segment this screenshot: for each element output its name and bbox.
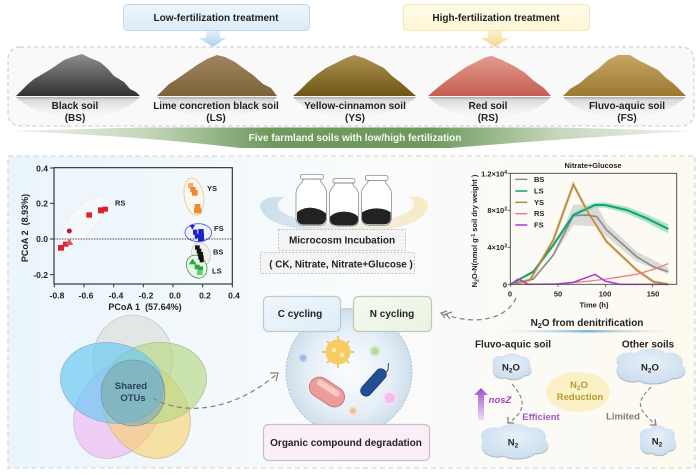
cluster labels: YS bbox=[207, 184, 217, 193]
soil: fluvo-aquic soil bbox=[563, 55, 686, 124]
box: treatments: ( CK, Nitrate, Nitrate+Glucose ) bbox=[269, 260, 413, 270]
chart: PCoA scatter bbox=[20, 164, 240, 312]
soil: lime concretion black soil bbox=[153, 55, 279, 124]
N2O reduction ellipse: N bbox=[570, 380, 577, 391]
heading: fluvo-aquic soil: Fluvo-aquic soil bbox=[475, 340, 551, 350]
y tick labels bbox=[33, 164, 48, 280]
x tick labels bbox=[50, 290, 240, 300]
arrow: nosZ increase bbox=[474, 388, 488, 420]
legend labels: FS bbox=[534, 220, 544, 230]
heading: other soils: Other soils bbox=[622, 340, 675, 350]
cluster labels: FS bbox=[214, 224, 224, 233]
cloud: N2 fluvo-aquic: N bbox=[508, 438, 515, 448]
soil: red soil: Red soil bbox=[469, 101, 508, 112]
chart y ticks bbox=[481, 170, 507, 290]
label: nosZ: nosZ bbox=[489, 395, 513, 406]
soil: black soil: Black soil bbox=[52, 101, 99, 112]
soil: yellow-cinnamon soil: (YS) bbox=[345, 113, 365, 124]
low-fertilization label box bbox=[124, 4, 310, 30]
soil: yellow-cinnamon soil bbox=[293, 55, 416, 124]
y tick labels: -0.2 bbox=[33, 270, 48, 280]
box: organic compound degradation bbox=[264, 424, 430, 460]
cloud: N2O fluvo-aquic: N bbox=[502, 362, 509, 374]
cluster labels: RS bbox=[115, 198, 125, 208]
soil: red soil bbox=[428, 56, 551, 124]
N2O reduction ellipse: O bbox=[581, 380, 588, 391]
chart y ticks: 1.2×10 bbox=[481, 170, 504, 178]
x axis title: PCoA 1 (57.64%) bbox=[108, 302, 182, 312]
y tick labels: 0.4 bbox=[36, 164, 48, 174]
chart x ticks bbox=[508, 290, 659, 298]
cluster labels: LS bbox=[212, 266, 222, 276]
arrow: shared OTUs to microbes bbox=[153, 373, 278, 408]
banner: five farmland soils: Five farmland soils with low/high fertilization bbox=[249, 133, 461, 144]
box: N cycling: N cycling bbox=[370, 309, 414, 320]
y tick labels: 0.2 bbox=[36, 198, 48, 208]
arrow: limited reduction bbox=[640, 387, 656, 425]
chart y title: N bbox=[470, 282, 479, 287]
N2O reduction ellipse: Reduction bbox=[557, 392, 603, 403]
cloud: N2O other soils bbox=[617, 349, 685, 385]
jar right bbox=[361, 176, 391, 225]
N2O reduction ellipse bbox=[546, 372, 610, 412]
chart y ticks: 4×10 bbox=[487, 243, 504, 252]
venn center label bbox=[115, 381, 147, 404]
soil: lime concretion black soil: (LS) bbox=[206, 113, 226, 124]
label: efficient: Efficient bbox=[522, 412, 561, 423]
x tick labels: -0.8 bbox=[50, 290, 65, 300]
cloud: N2 fluvo-aquic bbox=[481, 424, 549, 460]
chart x ticks: 100 bbox=[599, 290, 611, 298]
cloud: N2O fluvo-aquic bbox=[493, 353, 532, 380]
microbe: small blue cell bbox=[299, 354, 307, 362]
panel: lower analysis section bbox=[8, 156, 695, 468]
box: microcosm incubation: Microcosm Incubation bbox=[289, 236, 395, 246]
section title: O from denitrification bbox=[542, 318, 643, 329]
x tick labels: -0.2 bbox=[139, 290, 154, 300]
label: limited: Limited bbox=[606, 412, 640, 422]
venn center label: OTUs bbox=[120, 393, 146, 404]
chart y title: O-N(nmol g bbox=[470, 238, 479, 279]
cloud: N2O other soils: 2 bbox=[648, 368, 652, 374]
box: N cycling bbox=[354, 296, 432, 332]
chart title: Nitrate+Glucose bbox=[565, 161, 621, 170]
top section: soil treatments bbox=[8, 4, 694, 148]
cloud: N2 fluvo-aquic: 2 bbox=[515, 442, 519, 450]
crescent backdrop bbox=[260, 197, 428, 232]
chart y title: soil dry weight ) bbox=[470, 174, 479, 234]
box: treatments bbox=[260, 252, 414, 274]
chart y ticks: 4 bbox=[504, 170, 507, 176]
chart x title: Time (h) bbox=[579, 300, 609, 310]
cloud: N2O other soils: N bbox=[641, 362, 648, 374]
cloud: N2 other soils: N bbox=[652, 436, 659, 448]
legend labels bbox=[534, 175, 544, 230]
box: C cycling bbox=[264, 296, 340, 332]
microbe: small green cell bbox=[370, 346, 380, 356]
denitrification section bbox=[474, 318, 685, 460]
high-fertilization label box bbox=[404, 4, 590, 30]
venn diagram: shared OTUs bbox=[53, 315, 214, 475]
low-fertilization label box: Low-fertilization treatment bbox=[153, 13, 279, 24]
chart y title: 2 bbox=[474, 279, 480, 282]
line chart: N2O over time bbox=[470, 161, 677, 310]
chart x ticks: 0 bbox=[508, 290, 512, 298]
chart x ticks: 150 bbox=[647, 290, 659, 298]
legend line samples bbox=[515, 179, 527, 225]
microbial cell bbox=[286, 308, 412, 435]
x tick labels: 0.0 bbox=[169, 290, 181, 300]
panel: five farmland soils bbox=[8, 47, 694, 126]
cloud: N2O fluvo-aquic: 2 bbox=[509, 368, 513, 374]
chart y ticks: 3 bbox=[504, 206, 507, 212]
legend labels: BS bbox=[534, 175, 544, 184]
section title: 2 bbox=[538, 323, 542, 330]
microbe: blue bacillus bbox=[358, 363, 389, 398]
soil: lime concretion black soil: Lime concretion black soil bbox=[153, 101, 279, 112]
soil: black soil bbox=[16, 54, 140, 124]
cloud: N2O fluvo-aquic: O bbox=[513, 362, 520, 374]
y axis title: PCoA 2 (8.93%) bbox=[20, 194, 30, 262]
legend labels: RS bbox=[534, 209, 544, 218]
cluster labels bbox=[115, 184, 224, 276]
microbe: yellow coccus bbox=[322, 336, 354, 368]
x tick labels: -0.4 bbox=[109, 290, 124, 300]
box: microcosm incubation bbox=[278, 230, 406, 250]
x tick labels: -0.6 bbox=[79, 290, 94, 300]
cluster labels: BS bbox=[213, 248, 223, 256]
soil: yellow-cinnamon soil: Yellow-cinnamon soil bbox=[304, 101, 406, 112]
jar middle bbox=[329, 179, 359, 226]
chart y ticks: 8×10 bbox=[487, 206, 504, 215]
legend labels: LS bbox=[534, 186, 544, 196]
title rule bbox=[498, 330, 678, 332]
N2O reduction ellipse: 2 bbox=[577, 385, 581, 392]
incubation jars bbox=[260, 174, 428, 232]
chart y ticks: 3 bbox=[504, 244, 507, 250]
venn center label: Shared bbox=[115, 381, 147, 392]
chart y title: -1 bbox=[471, 234, 477, 238]
arrow: chart to N cycling bbox=[441, 298, 516, 320]
soil: fluvo-aquic soil: (FS) bbox=[617, 113, 637, 124]
microbe: pink cell bbox=[384, 392, 396, 404]
x tick labels: 0.2 bbox=[199, 290, 211, 300]
arrow: low-fertilization down bbox=[199, 31, 226, 47]
curves and axes bbox=[508, 173, 677, 287]
box: C cycling: C cycling bbox=[278, 309, 322, 320]
plot markers and hulls bbox=[50, 168, 232, 287]
cloud: N2 other soils: 2 bbox=[659, 442, 663, 448]
x tick labels: 0.4 bbox=[228, 290, 240, 300]
arrow: high-fertilization down bbox=[481, 31, 509, 47]
soil: fluvo-aquic soil: Fluvo-aquic soil bbox=[589, 101, 665, 112]
microbe: pink bacillus bbox=[306, 373, 348, 411]
cloud: N2 other soils bbox=[640, 425, 676, 456]
chart y ticks: 0 bbox=[503, 280, 507, 290]
soil: black soil: (BS) bbox=[65, 113, 85, 124]
section title: N bbox=[531, 318, 538, 329]
chart x ticks: 50 bbox=[554, 290, 562, 298]
arrow: efficient reduction bbox=[508, 384, 522, 423]
microbe: orange cell bbox=[350, 408, 356, 414]
cloud: N2O other soils: O bbox=[652, 362, 659, 374]
legend labels: YS bbox=[534, 198, 544, 207]
banner: five farmland soils bbox=[10, 128, 692, 148]
high-fertilization label box: High-fertilization treatment bbox=[432, 13, 560, 24]
soil: red soil: (RS) bbox=[478, 113, 498, 124]
jar left bbox=[296, 174, 327, 226]
box: organic compound degradation: Organic compound degradation bbox=[270, 438, 422, 449]
y tick labels: 0.0 bbox=[36, 234, 48, 244]
